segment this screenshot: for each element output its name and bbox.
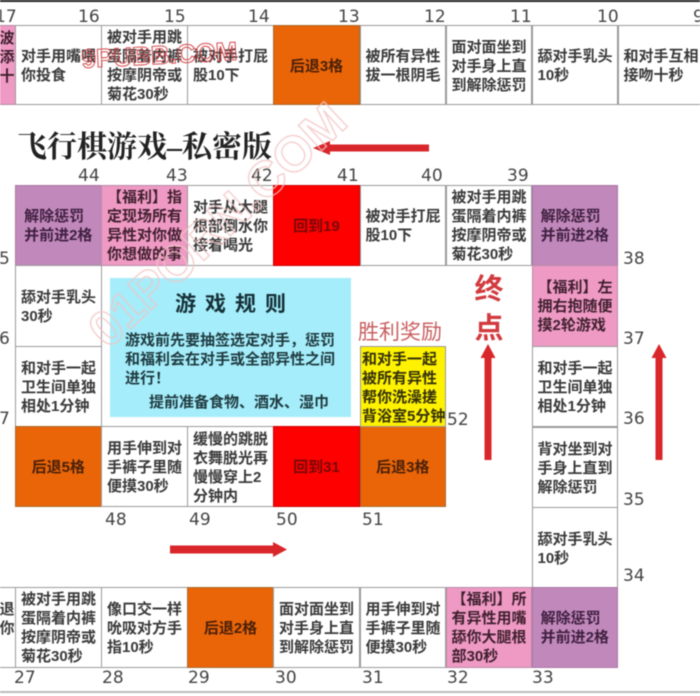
square 32: 【福利】所 [452,591,527,608]
square 16: 对手用嘴喂 [21,48,96,65]
number 38: 38 [623,249,645,269]
square 13: 后退3格 [290,58,343,74]
square 49: 衣舞脱光再 [193,450,268,466]
square 49 [187,426,274,507]
square 50 [273,426,360,507]
square 36 [532,346,618,427]
square 12 [360,25,446,105]
square 44: 解除惩罚 [24,208,84,225]
square 37: 拥右抱随便 [538,298,613,315]
square 28: 像口交一样 [107,601,182,618]
square 27: 按摩阴帝或 [21,629,96,646]
rules body: 和福利会在对手或全部异性之间 [125,350,335,368]
square 27: 蛋隔着内裤 [21,610,96,627]
square 35: 解除惩罚 [538,478,598,496]
square 44 [15,185,102,266]
square 45 [15,265,102,346]
square 37 [532,265,618,346]
square 52: victory reward: 帮你洗澡搓 [362,388,437,406]
square 38: 并前进2格 [541,227,609,244]
square 30: 到解除惩罚 [279,639,354,656]
square 42: 接着喝光 [193,237,253,254]
finish label: 点 [474,313,504,345]
number 34: 34 [623,566,645,586]
square 27: 被对手用跳 [21,591,96,608]
square 11 [446,25,532,105]
square 47: 后退5格 [32,459,85,476]
square 40 [360,185,446,266]
number 48: 48 [105,510,127,530]
square 32: 部30秒 [452,648,498,665]
watermark: site name over top row: 9PUBB.COM [81,36,238,74]
number 44: 44 [78,166,100,186]
square 12: 拔一根阴毛 [366,67,441,84]
number 27: 27 [14,668,36,688]
square 36: 相处1分钟 [538,398,606,415]
square 9 [618,25,700,105]
number 11: 11 [510,7,532,27]
number 50: 50 [276,510,298,530]
square 48: 用手伸到对 [107,440,182,457]
square 15: 蛋隔着内裤 [107,48,182,65]
number 32: 32 [447,668,469,688]
square 34: 舔对手乳头 [538,530,613,548]
square 11: 对手身上直 [452,58,527,74]
square 16: 你投食 [21,67,66,84]
square 35 [532,426,618,508]
square 42: 对手从大腿 [193,199,268,216]
square 28: 吮吸对方手 [107,620,182,637]
finish label: 终 [474,274,504,306]
square 17 [0,25,16,105]
square 36: 和对手一起 [538,360,613,377]
square 51: 后退3格 [376,459,429,476]
square 31: 手裤子里随 [366,620,441,637]
rules heading: 游戏规则 [175,293,295,316]
square 14: 股10下 [193,67,240,84]
square 52: victory reward: 背浴室5分钟 [362,408,445,424]
square 39: 蛋隔着内裤 [452,208,527,225]
square 43: 【福利】指 [107,189,182,206]
number 43: 43 [166,166,188,186]
rules body: 游戏前先要抽签选定对手，惩罚 [125,332,335,348]
square 46: 相处1分钟 [21,398,89,415]
square 39: 菊花30秒 [452,246,513,263]
square 49: 慢慢穿上2 [193,468,261,486]
number 36: 36 [623,409,645,429]
square 10: 舔对手乳头 [538,48,613,65]
square 13 [273,25,360,105]
right column squares [531,266,619,588]
square 43 [101,185,188,266]
square 15: 菊花30秒 [107,86,169,103]
square 36: 卫生间单独 [538,379,613,396]
square 14 [187,25,274,105]
square 10: 10秒 [538,67,569,84]
square 38: 解除惩罚 [541,208,601,225]
square 46: 卫生间单独 [21,379,96,396]
square 29 [187,587,274,668]
square 16 [15,25,102,105]
square 37: 摸2轮游戏 [538,317,606,334]
top row of squares [0,24,700,106]
square 38 [532,185,618,266]
square 52: victory reward: 被所有异性 [362,370,437,386]
square 46 [15,346,102,427]
square 39: 按摩阴帝或 [452,227,527,244]
square 48: 便摸30秒 [107,478,169,495]
square 42: 根部倒水你 [193,218,268,235]
square 46: 和对手一起 [21,360,96,377]
square 31: 用手伸到对 [366,601,441,618]
square 30 [273,587,360,668]
square 40: 被对手打屁 [366,208,441,225]
number 41: 41 [337,166,359,186]
number 33: 33 [532,668,554,688]
square 15: 被对手用跳 [107,29,182,46]
square 35: 手身上直到 [538,460,613,476]
watermark: diagonal site name: 01PORN.COM [77,92,357,358]
square 39: 被对手用跳 [452,189,527,206]
rules panel [110,278,351,417]
square 48: 手裤子里随 [107,459,182,476]
second row of squares [14,184,619,267]
number 37: 37 [623,329,645,349]
victory reward label: 胜利奖励 [358,321,442,344]
square 11: 到解除惩罚 [452,76,527,94]
square 49: 缓慢的跳脱 [193,430,268,448]
square 49: 分钟内 [193,488,238,504]
square 50: 回到31 [293,459,340,476]
square 26 fragment [0,587,16,668]
rules preparation note: 提前准备食物、酒水、湿巾 [149,394,329,411]
square 29: 后退2格 [204,620,257,637]
top row numbers [0,7,700,27]
square 37: 【福利】左 [538,279,613,296]
square 32 [446,587,532,668]
square 14: 被对手打屁 [193,48,268,65]
square 47 [15,426,102,507]
square 31 [360,587,446,668]
square 52: victory reward: 和对手一起 [362,350,437,368]
top edge line [0,0,700,2]
square 43: 你想做的事 [107,246,182,263]
square 51 [360,426,446,507]
square 30: 面对面坐到 [279,601,354,618]
number 40: 40 [421,166,443,186]
square 9: 接吻十秒 [624,67,684,84]
number 49: 49 [189,510,211,530]
square 10 [532,25,618,105]
square 48 [101,426,188,507]
square 33 [532,587,618,668]
number 52: 52 [447,410,469,430]
square 32: 有异性用嘴 [452,610,527,627]
rules body: 进行！ [125,370,170,386]
square 11: 面对面坐到 [452,38,527,56]
bottom row of squares [0,586,619,669]
square 27 [15,587,102,668]
side and lower numbers [0,249,645,688]
rules body [124,332,335,386]
lower middle row of squares [14,425,447,508]
square 35: 背对坐到对 [538,440,613,458]
square 41 [273,185,360,266]
number 15: 15 [164,7,186,27]
square 15: 按摩阴帝或 [107,67,182,84]
square 9: 和对手互相 [624,48,699,65]
number 12: 12 [424,7,446,27]
square 27: 菊花30秒 [21,648,83,665]
square 28 [101,587,188,668]
square 43: 定现场所有 [107,208,182,225]
bottom edge line [0,691,700,692]
square 42 [187,185,274,266]
number 42: 42 [251,166,273,186]
square 44: 并前进2格 [24,227,92,244]
square 28: 指10秒 [107,639,154,656]
square 15 [101,25,188,105]
square 39 [446,185,532,266]
number 13: 13 [338,7,360,27]
square 34: 10秒 [538,550,569,566]
number 10: 10 [597,7,619,27]
square 43: 异性对你做 [107,227,182,244]
number 31: 31 [362,668,384,688]
left column squares [14,264,103,426]
square 40: 股10下 [366,227,412,244]
number 28: 28 [102,668,124,688]
number 30: 30 [275,668,297,688]
square 41: 回到19 [293,218,340,235]
square 30: 对手身上直 [279,620,354,637]
square 31: 便摸30秒 [366,639,427,656]
number 29: 29 [188,668,210,688]
square 32: 舔你大腿根 [452,629,527,646]
title: 飞行棋游戏–私密版 [17,131,272,164]
finish label [474,274,504,345]
number 35: 35 [623,490,645,510]
square 34 [532,507,618,588]
number 14: 14 [248,7,270,27]
number 16: 16 [78,7,100,27]
square 45: 30秒 [21,308,53,325]
number 51: 51 [362,510,384,530]
number 39: 39 [507,166,529,186]
square 33: 并前进2格 [541,629,609,646]
square 45: 舔对手乳头 [21,289,96,306]
square 12: 被所有异性 [366,48,441,65]
square 33: 解除惩罚 [541,610,601,627]
second row numbers [78,166,529,186]
square 52: victory reward [360,346,446,427]
